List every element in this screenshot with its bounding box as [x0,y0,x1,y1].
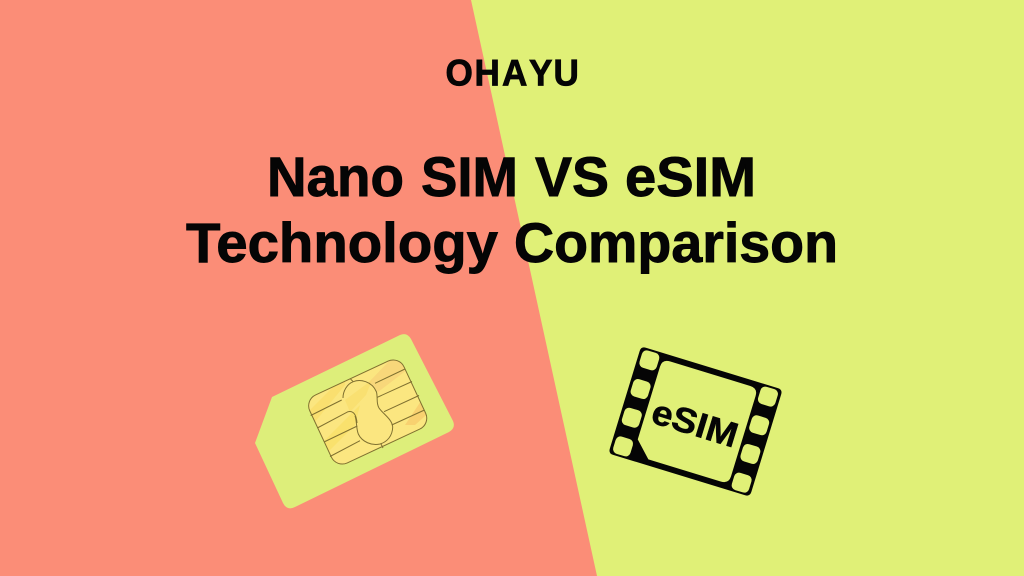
title: eSIM [625,145,756,208]
icon: nano SIM card [255,334,454,508]
title: VS [535,145,609,208]
panel: red diagonal background [0,0,597,576]
eSIM label: eSIM [647,392,743,455]
title [186,145,838,274]
SIM chip [308,360,428,464]
logo: OHAYU: OHAYU [445,52,579,94]
film perforations [612,349,779,494]
title: Comparison [514,211,838,274]
icon: eSIM film frame [608,346,783,497]
film frame body [608,346,783,497]
title: Nano [267,145,404,208]
title: Technology [186,211,498,274]
title: SIM [421,145,518,208]
SIM card body [255,334,454,508]
